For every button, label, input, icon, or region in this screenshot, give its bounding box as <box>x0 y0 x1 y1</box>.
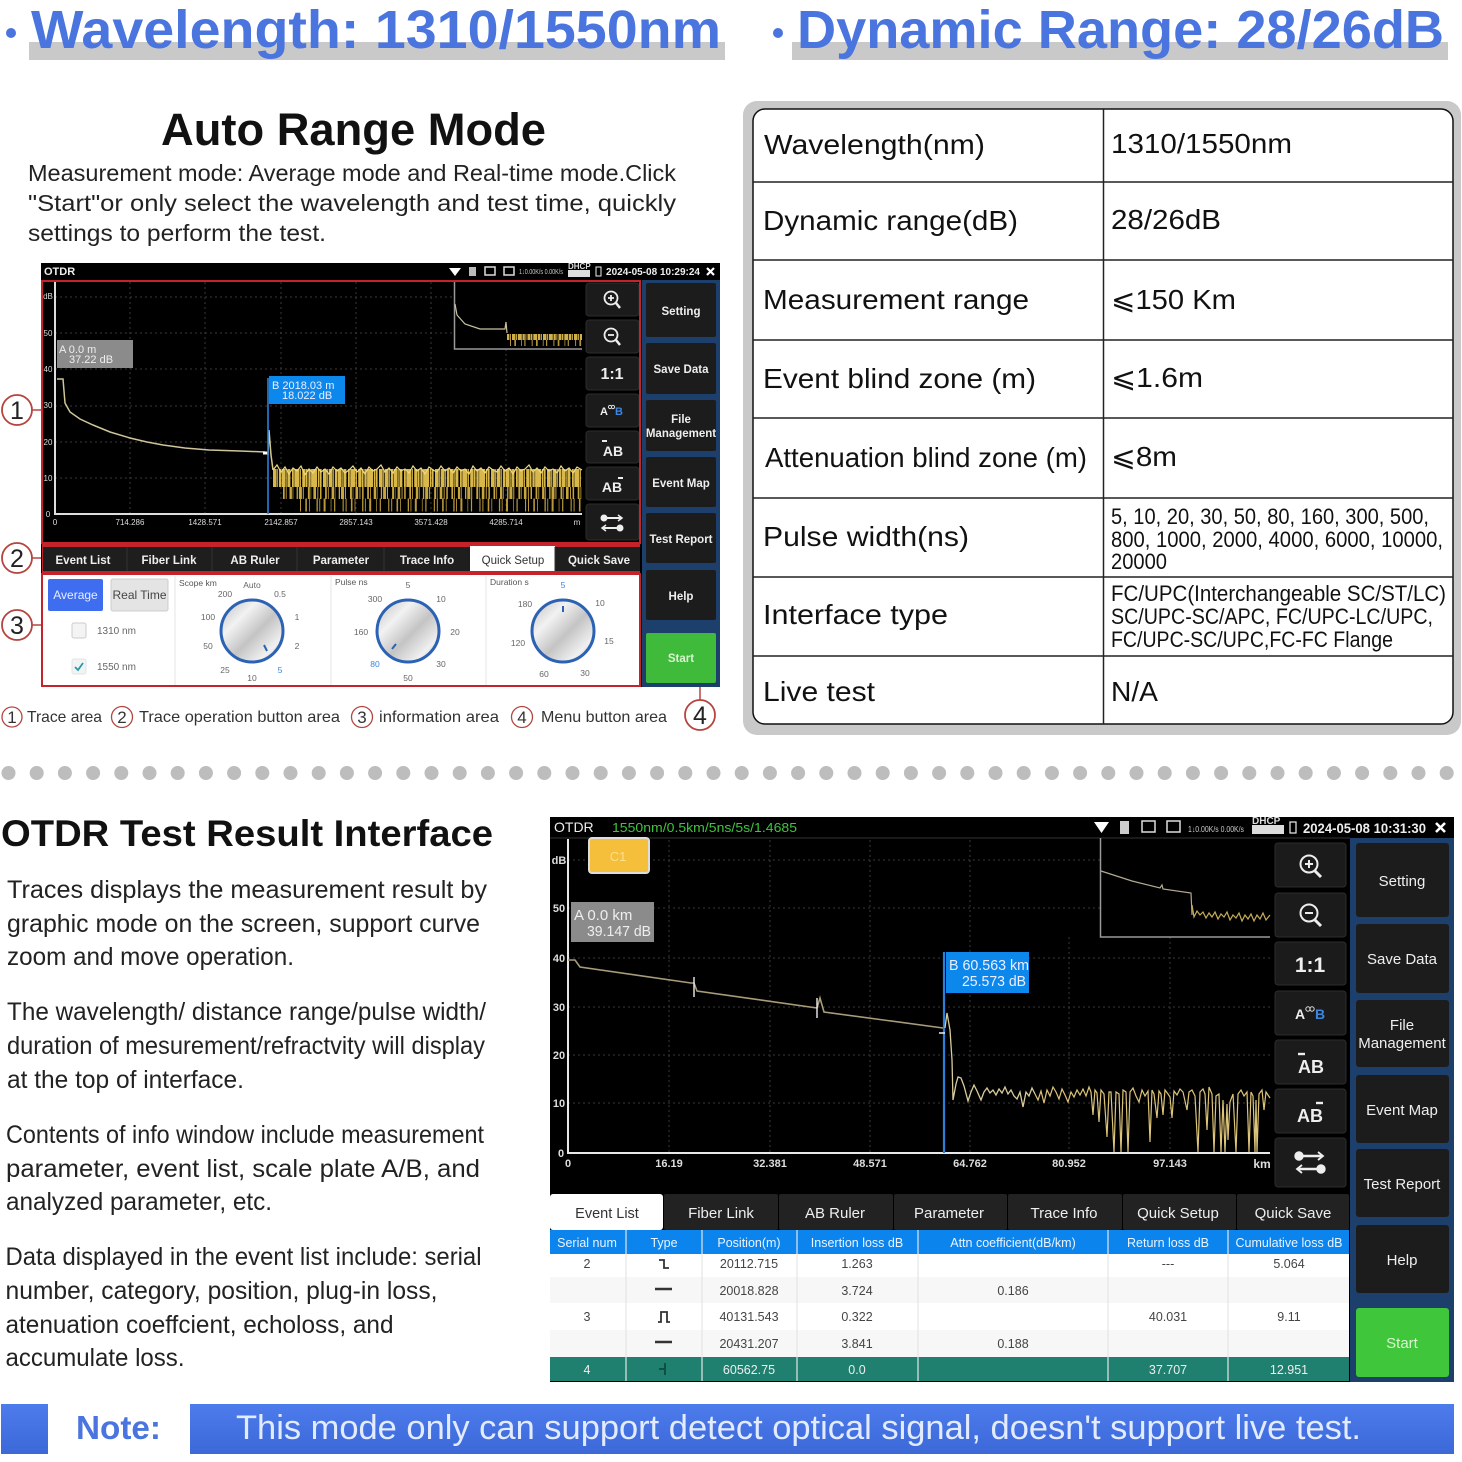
icon: move ab left: AB <box>1298 1057 1324 1077</box>
table row fiber 1: 3.724 <box>841 1284 873 1298</box>
icon: move ab right: AB <box>602 479 622 495</box>
table row 3: 0.322 <box>841 1310 873 1324</box>
icon: zoom out <box>1300 904 1321 926</box>
row: pulse width: 5, 10, 20, 30, 50, 80, 160, 300, 500, <box>1111 504 1429 529</box>
information area <box>42 574 640 686</box>
table row 3: 3 <box>584 1310 591 1324</box>
row: dynamic range: Dynamic range(dB) <box>763 205 1018 236</box>
dial: pulse: 30 <box>436 659 446 669</box>
dial: pulse: 5 <box>406 580 411 590</box>
y axis labels <box>43 292 53 519</box>
tabs: Quick Setup <box>1137 1205 1219 1222</box>
tabs: Fiber Link <box>688 1205 754 1222</box>
table header: Serial num <box>557 1236 617 1250</box>
icon: a b link: A <box>1295 1006 1305 1022</box>
dial: pulse: 300 <box>368 594 382 604</box>
icon: swap <box>602 515 622 531</box>
table row 2: 1.263 <box>841 1257 873 1271</box>
status bar: 2024-05-08 10:29:24 <box>606 266 700 278</box>
y axis labels: dB <box>552 855 566 867</box>
row: interface type <box>763 581 1446 652</box>
dial: scope: 25 <box>220 665 230 675</box>
menu buttons: Setting <box>662 306 700 318</box>
text block: top of interface: The wavelength/ distance range/pulse width/ <box>7 998 486 1026</box>
text block: traces: zoom and move operation. <box>7 943 294 971</box>
dial: duration: 10 <box>595 598 605 608</box>
dial: duration: 180 <box>518 599 532 609</box>
x axis labels: km <box>1253 1157 1271 1171</box>
y axis labels: 50 <box>553 903 565 915</box>
icon: swap <box>1296 1152 1324 1173</box>
trace area <box>552 838 1271 1171</box>
text block: measurement mode description: Measurement mode: Average mode and Real-time mode.Click <box>28 160 676 186</box>
dial: scope: 50 <box>203 641 213 651</box>
row: dynamic range: 28/26dB <box>1111 204 1221 235</box>
marker a label: 39.147 dB <box>587 923 651 940</box>
icon: zoom in <box>1300 856 1321 877</box>
y axis labels: 10 <box>44 474 53 483</box>
note label: Note: <box>76 1409 161 1446</box>
x axis labels: 48.571 <box>853 1158 887 1170</box>
text block: top of interface: duration of mesurement/refractvity will display <box>7 1032 485 1060</box>
table header <box>550 1230 1349 1254</box>
tabs: trace operation buttons: Fiber Link <box>142 555 197 567</box>
button: average <box>48 579 103 611</box>
legend: Menu button area <box>541 709 667 726</box>
dial: scope: 1 <box>295 612 300 622</box>
legend: 2 <box>117 708 127 727</box>
table row 4 highlighted: 0.0 <box>848 1363 866 1377</box>
x axis labels: 4285.714 <box>489 518 523 527</box>
legend <box>2 706 667 728</box>
menu buttons: File <box>671 414 691 426</box>
row: pulse width <box>763 504 1443 574</box>
table row 3: 40.031 <box>1149 1310 1187 1324</box>
status bar: DHCP <box>1252 816 1281 827</box>
icon: move ab left: AB <box>603 443 623 459</box>
status bar: 1↓0.00K/s 0.00K/s <box>1188 825 1244 834</box>
trace area <box>43 280 582 527</box>
x axis labels: 97.143 <box>1153 1158 1187 1170</box>
table row 2 <box>584 1257 1305 1271</box>
table row 4 highlighted: 60562.75 <box>723 1363 775 1377</box>
table row 4 highlighted: 4 <box>584 1363 591 1377</box>
menu buttons: Management <box>646 428 716 440</box>
row: interface type: FC/UPC(Interchangeable SC/ST/LC) <box>1111 581 1446 606</box>
table row fiber 2: 20431.207 <box>719 1337 779 1351</box>
axes <box>55 281 582 514</box>
table header: Insertion loss dB <box>811 1236 903 1250</box>
menu buttons: File <box>1390 1017 1414 1034</box>
x axis labels: 0 <box>53 518 58 527</box>
legend: Trace area <box>27 709 102 726</box>
marker b cursor and label: B 2018.03 m <box>272 380 334 392</box>
menu buttons: Save Data <box>654 364 709 376</box>
marker b cursor and label <box>944 952 1029 1153</box>
tabs: trace operation buttons: Trace Info <box>400 555 454 567</box>
row: measurement range: ⩽150 Km <box>1111 284 1236 315</box>
panel: auto range screen <box>41 262 720 687</box>
callout 2 <box>2 543 41 573</box>
row: wavelength <box>764 128 1292 160</box>
dial: pulse: 20 <box>450 627 460 637</box>
tabs: trace operation buttons: Parameter <box>313 555 370 567</box>
y axis labels: dB <box>43 292 53 301</box>
tabs: Event List <box>575 1206 639 1222</box>
marker a label: 37.22 dB <box>69 354 113 366</box>
panel: test result screen <box>550 816 1454 1382</box>
text block: traces: graphic mode on the screen, support curve <box>7 910 480 938</box>
dial: scope: 0.5 <box>274 589 286 599</box>
button: real time <box>111 579 168 611</box>
table row 2: 5.064 <box>1273 1257 1305 1271</box>
icon: one to one: 1:1 <box>1295 954 1325 977</box>
x axis labels: 3571.428 <box>414 518 448 527</box>
y axis labels: 0 <box>46 510 51 519</box>
status bar: DHCP <box>568 262 591 271</box>
legend: information area <box>379 709 499 726</box>
table row 2: 2 <box>584 1257 591 1271</box>
row: event blind zone <box>763 362 1203 394</box>
y axis labels <box>552 855 566 1160</box>
row: wavelength: 1310/1550nm <box>1111 128 1292 159</box>
status bar: 2024-05-08 10:31:30 <box>1303 821 1426 836</box>
dial: scope: 2 <box>295 641 300 651</box>
row: attenuation blind zone: Attenuation blind zone (m) <box>765 442 1087 473</box>
text block: top of interface <box>7 998 486 1094</box>
callout 4 <box>685 687 715 730</box>
row: pulse width: 20000 <box>1111 549 1167 574</box>
marker a label <box>57 340 133 368</box>
y axis labels: 30 <box>553 1002 565 1014</box>
callout 2: 2 <box>10 545 24 573</box>
menu buttons: Start <box>1386 1335 1419 1352</box>
panel: specification table <box>743 101 1461 735</box>
x axis labels: 1428.571 <box>188 518 222 527</box>
tabs: trace operation buttons: AB Ruler <box>230 555 280 567</box>
noise trace <box>1035 1087 1270 1152</box>
inset overview <box>454 280 582 349</box>
icon: a b link: B <box>615 406 623 418</box>
tag: c1: C1 <box>610 849 626 864</box>
checkbox: 1550 nm <box>72 659 136 674</box>
table row 2: 20112.715 <box>720 1257 778 1271</box>
row: pulse width: Pulse width(ns) <box>763 521 969 552</box>
y axis labels: 30 <box>44 401 53 410</box>
table row fiber 2: 0.188 <box>997 1337 1029 1351</box>
y axis labels: 20 <box>44 438 53 447</box>
menu buttons: Event Map <box>1366 1102 1438 1119</box>
button: real time: Real Time <box>112 588 167 602</box>
text block: event list: atenuation coeffcient, echoloss, and <box>6 1311 394 1339</box>
menu buttons: Event Map <box>652 478 710 490</box>
row: measurement range: Measurement range <box>763 284 1029 315</box>
row: interface type: SC/UPC-SC/APC, FC/UPC-LC/UPC, <box>1111 604 1433 629</box>
tabs: trace operation buttons: Event List <box>56 555 111 567</box>
dial: duration: 60 <box>539 669 549 679</box>
table header: Cumulative loss dB <box>1236 1236 1342 1250</box>
tabs: trace operation buttons: Quick Setup <box>482 555 544 567</box>
legend: 3 <box>357 708 367 727</box>
text block: measurement mode description: "Start"or only select the wavelength and test time, quickly <box>28 190 676 216</box>
table row fiber 2: 3.841 <box>841 1337 873 1351</box>
legend: 4 <box>517 708 527 727</box>
marker b cursor and label: 25.573 dB <box>962 973 1026 990</box>
icon: move ab right: AB <box>1297 1106 1323 1126</box>
icon: a b link: A <box>600 406 608 418</box>
status bar: OTDR <box>554 819 594 835</box>
tabs: Parameter <box>914 1205 984 1222</box>
row: wavelength: Wavelength(nm) <box>764 129 985 160</box>
note banner <box>190 1404 1454 1454</box>
table row fiber 1: 0.186 <box>997 1284 1029 1298</box>
icon: a b link <box>600 405 623 418</box>
text block: measurement mode description: settings to perform the test. <box>28 220 326 246</box>
red frame: trace area <box>42 281 640 543</box>
callout 3: 3 <box>10 612 24 640</box>
tabs: AB Ruler <box>805 1205 865 1222</box>
status bar: OTDR <box>44 266 75 278</box>
dial: scope: 10 <box>247 673 257 683</box>
y axis labels: 40 <box>44 365 53 374</box>
curve trace <box>568 960 943 1028</box>
dial: duration: 30 <box>580 668 590 678</box>
y axis labels: 20 <box>553 1050 565 1062</box>
callout 1 <box>2 395 41 425</box>
marker b cursor and label: B 60.563 km <box>949 957 1029 974</box>
table row fiber 1: 20018.828 <box>719 1284 779 1298</box>
tabs: Quick Save <box>1255 1205 1331 1222</box>
dial: duration <box>490 577 614 679</box>
text block: event list: number, category, position, plug-in loss, <box>6 1277 438 1305</box>
icon: a b link: B <box>1315 1006 1325 1022</box>
dial: pulse: 80 <box>370 659 380 669</box>
table header: Position(m) <box>717 1236 781 1250</box>
table row fiber 2 <box>655 1337 1029 1351</box>
dial: scope: Scope km <box>179 578 217 588</box>
x axis labels: 2142.857 <box>264 518 298 527</box>
curve trace <box>57 379 265 452</box>
table row 4 highlighted: 37.707 <box>1149 1363 1187 1377</box>
legend: Trace operation button area <box>139 709 340 726</box>
menu buttons: Start <box>668 653 694 665</box>
menu buttons: Help <box>1387 1252 1417 1269</box>
noise trace <box>273 465 582 505</box>
text block: measurement mode description <box>28 160 676 246</box>
x axis labels: 64.762 <box>953 1158 987 1170</box>
checkbox: 1310 nm <box>72 623 136 638</box>
menu buttons: Test Report <box>649 534 713 546</box>
row: event blind zone: Event blind zone (m) <box>763 363 1036 394</box>
tag: c1 <box>589 838 649 873</box>
marker b cursor and label: 18.022 dB <box>282 390 332 402</box>
dial: scope: 5 <box>278 665 283 675</box>
row: interface type: FC/UPC-SC/UPC,FC-FC Flange <box>1111 627 1393 652</box>
checkbox: 1310 nm: 1310 nm <box>97 626 136 637</box>
row: live test <box>763 676 1158 707</box>
text block: traces: Traces displays the measurement result by <box>7 876 487 904</box>
text block: info window: parameter, event list, scale plate A/B, and <box>6 1155 480 1183</box>
x axis labels: 0 <box>565 1158 571 1170</box>
table row 3: 40131.543 <box>719 1310 779 1324</box>
x axis labels: 2857.143 <box>339 518 373 527</box>
row: measurement range <box>763 284 1236 315</box>
icon: zoom in <box>604 292 620 308</box>
x axis labels <box>53 518 581 527</box>
dial: pulse <box>335 577 460 683</box>
note marker block <box>1 1404 48 1454</box>
text block: event list: accumulate loss. <box>6 1344 184 1372</box>
y axis labels: 40 <box>553 953 565 965</box>
status bar <box>550 816 1445 838</box>
table row fiber 1 <box>655 1284 1029 1298</box>
row: live test: N/A <box>1111 676 1158 707</box>
text block: event list: Data displayed in the event list include: serial <box>6 1243 482 1271</box>
callout 4: 4 <box>693 702 707 730</box>
tool buttons <box>1275 843 1346 1187</box>
dial: scope: Auto <box>243 580 261 590</box>
table row 3: 9.11 <box>1277 1310 1301 1324</box>
x axis labels: m <box>574 518 581 527</box>
text block: top of interface: at the top of interface. <box>7 1066 244 1094</box>
callout 1: 1 <box>10 397 24 425</box>
dial: pulse: 10 <box>436 594 446 604</box>
dial: duration: 5 <box>561 580 566 590</box>
menu buttons: Save Data <box>1367 951 1438 968</box>
dial: duration: Duration s <box>490 577 529 587</box>
text block: info window: Contents of info window include measurement <box>6 1121 484 1149</box>
heading: dynamic range: Dynamic Range: 28/26dB <box>797 0 1444 60</box>
menu buttons: Test Report <box>1364 1176 1441 1193</box>
menu buttons <box>1350 838 1454 1382</box>
text block: traces <box>7 876 487 971</box>
axes <box>568 839 1270 1153</box>
table row 2: --- <box>1162 1257 1174 1271</box>
text block: event list <box>6 1243 482 1372</box>
row: live test: Live test <box>763 676 875 707</box>
heading: wavelength: Wavelength: 1310/1550nm <box>31 0 721 60</box>
row: attenuation blind zone: ⩽8m <box>1111 441 1177 472</box>
status bar: 1550nm/0.5km/5ns/5s/1.4685 <box>612 820 797 835</box>
icon: a b link <box>1295 1006 1325 1022</box>
menu buttons <box>642 280 720 687</box>
y axis labels: 10 <box>553 1098 565 1110</box>
tabs: Trace Info <box>1031 1205 1097 1222</box>
dial: duration: 120 <box>511 638 525 648</box>
table row 3 <box>584 1310 1301 1324</box>
table header: Type <box>650 1236 678 1250</box>
x axis labels <box>565 1157 1271 1171</box>
dial: scope <box>179 578 300 683</box>
dial: pulse: 50 <box>403 673 413 683</box>
tabs: trace operation buttons <box>42 544 640 573</box>
note banner: This mode only can support detect optical signal, doesn't support live test. <box>236 1409 1361 1447</box>
x axis labels: 16.19 <box>655 1158 683 1170</box>
y axis labels: 50 <box>44 329 53 338</box>
callout 3 <box>2 610 41 640</box>
dial: scope: 200 <box>218 589 232 599</box>
text block: info window <box>6 1121 484 1216</box>
y axis labels: 0 <box>558 1148 564 1160</box>
marker a label <box>571 902 654 942</box>
event table <box>550 1230 1349 1381</box>
tool buttons <box>586 283 639 540</box>
checkbox: 1550 nm: 1550 nm <box>97 662 136 673</box>
table row 4 highlighted: 12.951 <box>1270 1363 1308 1377</box>
menu buttons: Management <box>1358 1035 1447 1052</box>
table row 4 highlighted <box>550 1357 1349 1381</box>
menu buttons: Setting <box>1379 873 1425 890</box>
marker a label: A 0.0 km <box>574 907 632 924</box>
x axis labels: 32.381 <box>753 1158 787 1170</box>
icon: one to one: 1:1 <box>600 366 624 383</box>
menu buttons: Help <box>669 591 693 603</box>
table header: Return loss dB <box>1127 1236 1209 1250</box>
title: otdr test result interface: OTDR Test Result Interface <box>1 813 493 854</box>
icon: zoom out <box>604 328 620 345</box>
tabs <box>550 1193 1349 1230</box>
row: interface type: Interface type <box>763 599 948 630</box>
row: event blind zone: ⩽1.6m <box>1111 362 1203 393</box>
dial: scope: 100 <box>201 612 215 622</box>
legend: 1 <box>7 708 17 727</box>
dial: pulse: 160 <box>354 627 368 637</box>
marker b cursor and label <box>268 376 345 514</box>
title: auto range mode: Auto Range Mode <box>161 104 546 155</box>
text block: info window: analyzed parameter, etc. <box>6 1188 272 1216</box>
dial: pulse: Pulse ns <box>335 577 368 587</box>
x axis labels: 80.952 <box>1052 1158 1086 1170</box>
x axis labels: 714.286 <box>116 518 145 527</box>
button: average: Average <box>53 588 98 602</box>
row: dynamic range <box>763 204 1221 236</box>
status bar: 1↓0.00K/s 0.00K/s <box>519 269 563 276</box>
marker a label: A 0.0 m <box>59 344 96 356</box>
dial: duration: 15 <box>604 636 614 646</box>
row: pulse width: 800, 1000, 2000, 4000, 6000, 10000, <box>1111 527 1443 552</box>
tabs: trace operation buttons: Quick Save <box>568 555 630 567</box>
status bar <box>44 262 714 278</box>
inset overview <box>1100 838 1270 937</box>
table header: Attn coefficient(dB/km) <box>950 1236 1076 1250</box>
